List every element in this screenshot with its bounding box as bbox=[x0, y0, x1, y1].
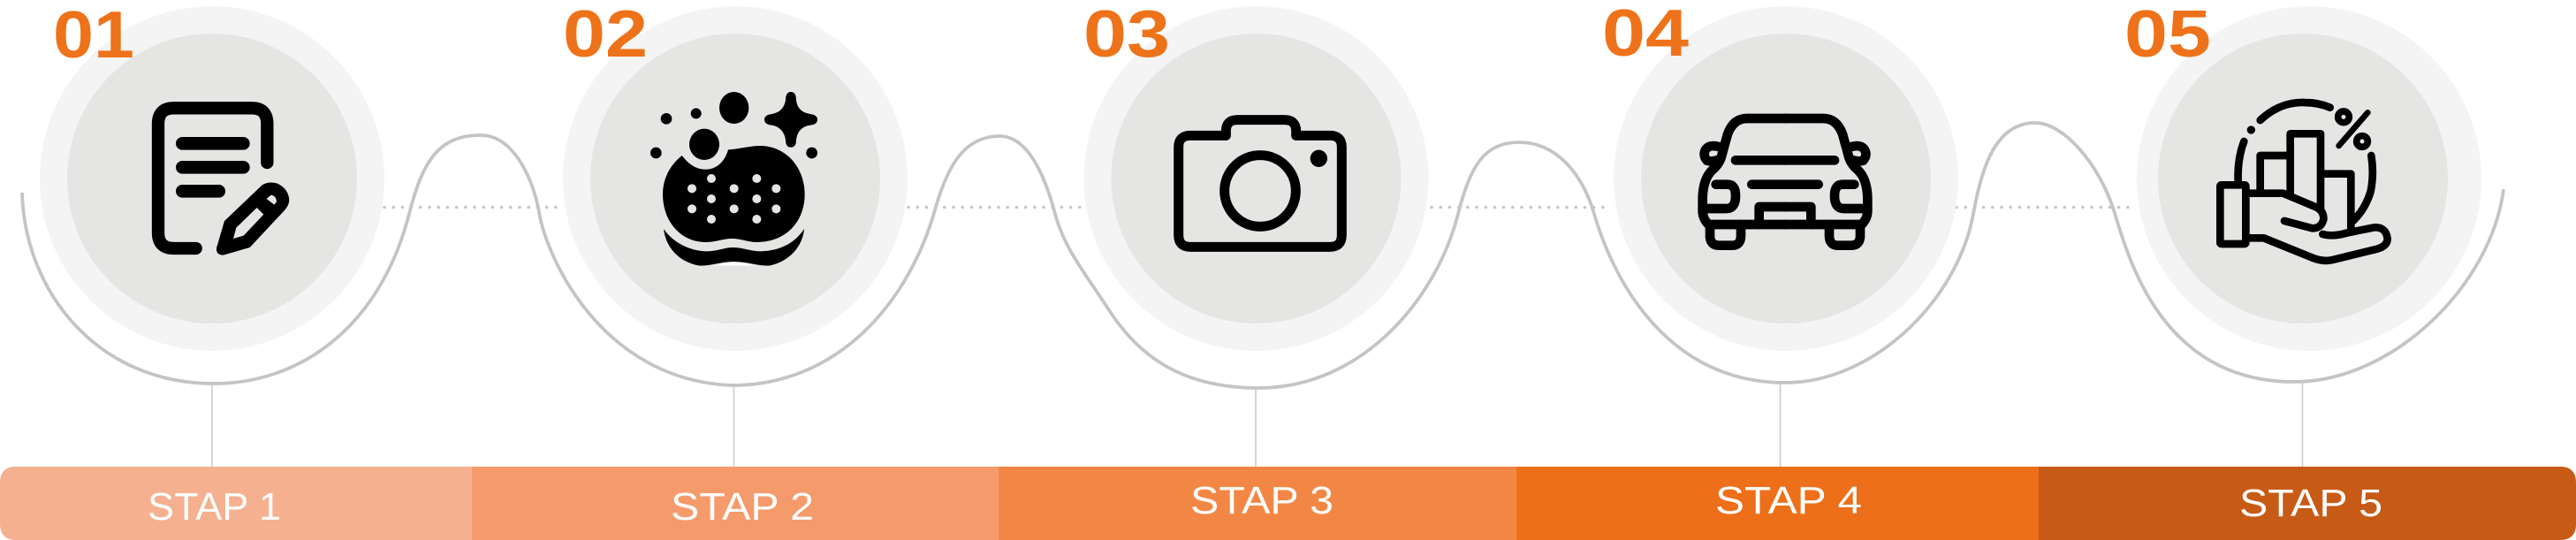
step bar bbox=[0, 467, 2576, 540]
icon: sponge with bubbles bbox=[650, 92, 817, 266]
circle 1 bbox=[40, 6, 384, 351]
step label 2: STAP 2 bbox=[671, 485, 814, 529]
circle 5 bbox=[2137, 6, 2481, 351]
step label 5: STAP 5 bbox=[2239, 482, 2382, 525]
circle 4 bbox=[1614, 6, 1958, 351]
icon: camera bbox=[1179, 120, 1341, 247]
icon: car front bbox=[1703, 118, 1867, 246]
circle 3 bbox=[1083, 6, 1428, 351]
circle 2 bbox=[563, 6, 908, 351]
step label 3: STAP 3 bbox=[1190, 479, 1334, 522]
vertical connector lines bbox=[212, 382, 2303, 467]
icon: hand holding bar chart with percent bbox=[2220, 103, 2388, 261]
dotted connector line bbox=[384, 206, 2133, 209]
wavy timeline curve bbox=[22, 123, 2504, 388]
step label 4: STAP 4 bbox=[1715, 479, 1862, 522]
step label 1: STAP 1 bbox=[148, 485, 281, 529]
icon: document with pencil bbox=[158, 108, 289, 255]
